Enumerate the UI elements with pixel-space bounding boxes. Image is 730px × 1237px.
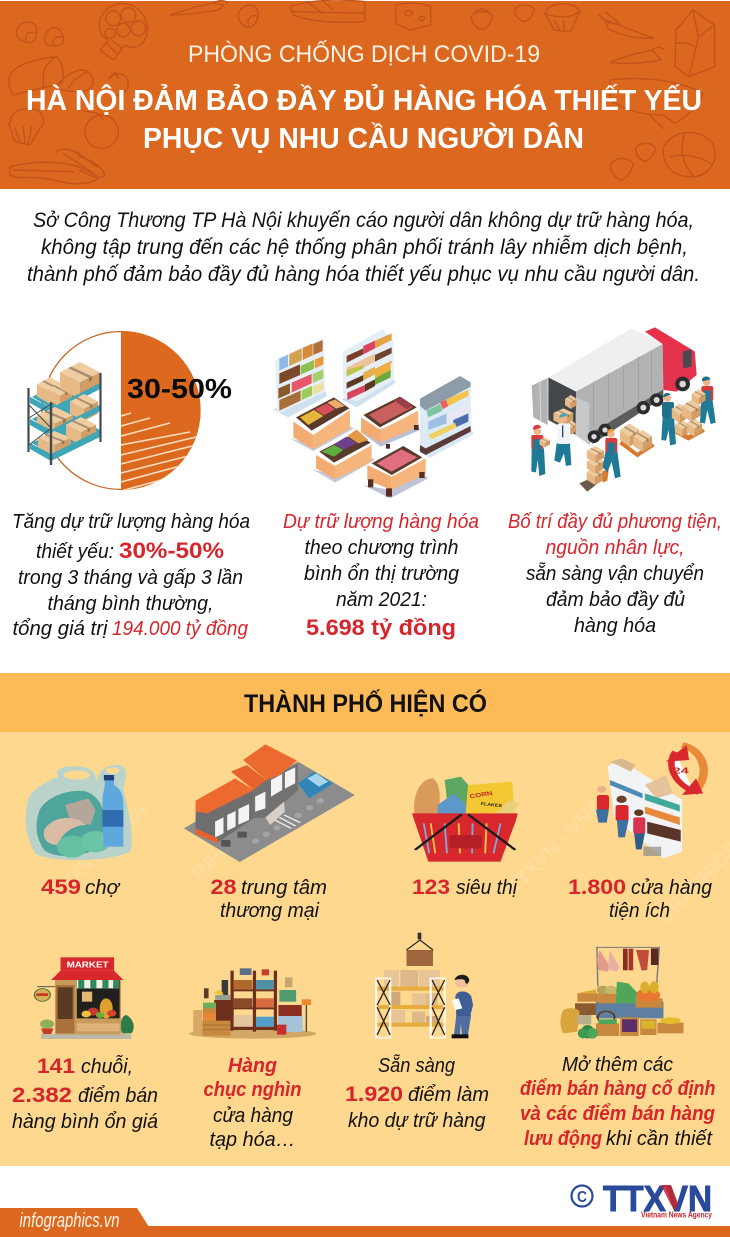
- column 1 text: 194.000 tỷ đồng: [112, 618, 248, 640]
- label: mở thêm các điểm bán hàng: Mở thêm các: [562, 1054, 673, 1076]
- icon: convenience store with 24h: [596, 745, 704, 858]
- shelf A: [273, 338, 327, 417]
- label: 1.800 cửa hàng tiện ích: cửa hàng: [631, 877, 712, 899]
- label: 141 chuỗi, 2.382 điểm bán hàng bình ổn giá: 2.382: [12, 1084, 72, 1107]
- panel: city facilities: [0, 732, 730, 1166]
- labels row 2: [12, 1054, 716, 1151]
- icon: market bag: [26, 765, 132, 860]
- label: 141 chuỗi, 2.382 điểm bán hàng bình ổn giá: hàng bình ổn giá: [12, 1111, 158, 1133]
- faint watermarks: [48, 760, 730, 929]
- worker 3: [603, 429, 621, 478]
- intro paragraph: Sở Công Thương TP Hà Nội khuyến cáo người dân không dự trữ hàng hóa,: [33, 209, 694, 232]
- worker 5: [692, 377, 716, 424]
- food doodles left: [8, 0, 365, 184]
- column 3 text: nguồn nhân lực,: [546, 537, 684, 559]
- shelf B: [342, 329, 396, 407]
- label: 459 chợ: 459: [41, 876, 81, 899]
- label: 28 trung tâm thương mại: trung tâm: [241, 877, 327, 899]
- header subtitle: PHÒNG CHỐNG DỊCH COVID-19: [188, 40, 540, 68]
- section heading band: THÀNH PHỐ HIỆN CÓ: [244, 688, 487, 718]
- label: 24 hours: 24: [673, 766, 689, 776]
- pie stripes: [121, 413, 200, 491]
- intro paragraph: [27, 209, 700, 286]
- label: market sign: MARKET: [67, 961, 109, 970]
- label: hàng chục nghìn cửa hàng tạp hóa: Hàng: [228, 1055, 277, 1077]
- label: mở thêm các điểm bán hàng: khi cần thiết: [606, 1128, 713, 1150]
- worker 4: [661, 393, 676, 445]
- column 3 text: [508, 511, 722, 637]
- labels row 1: [41, 876, 712, 922]
- icon: shopping mall: [184, 744, 355, 862]
- table C: [313, 429, 375, 483]
- faint watermarks: INFOGRAPHICS: [188, 760, 312, 884]
- pie orange half: [121, 331, 200, 490]
- label: 141 chuỗi, 2.382 điểm bán hàng bình ổn giá: điểm bán: [78, 1085, 158, 1107]
- label: hàng chục nghìn cửa hàng tạp hóa: chục nghìn: [204, 1079, 302, 1101]
- icon: warehouse worker: [376, 933, 473, 1038]
- label: mở thêm các điểm bán hàng: và các điểm bán hàng: [520, 1103, 715, 1125]
- column 3 text: đảm bảo đầy đủ: [546, 589, 685, 611]
- label: sẵn sàng 1.920 điểm làm kho dự trữ hàng: kho dự trữ hàng: [348, 1110, 486, 1132]
- icon: grocery shelves: [189, 968, 317, 1039]
- red V mark: [661, 1185, 678, 1211]
- pie value: 30-50%: [127, 373, 232, 404]
- truck: [532, 327, 697, 445]
- footer bar: infographics.vn: [20, 1210, 120, 1232]
- faint watermarks: TTXVN - VNA: [503, 794, 607, 899]
- label: hàng chục nghìn cửa hàng tạp hóa: [204, 1055, 302, 1151]
- label: sẵn sàng 1.920 điểm làm kho dự trữ hàng: Sẵn sàng: [378, 1054, 455, 1077]
- icon: warehouse shelf: [28, 362, 100, 465]
- icon: produce stall: [560, 947, 684, 1039]
- label: 123 siêu thị: siêu thị: [456, 877, 518, 899]
- column 1 text: thiết yếu:: [36, 541, 114, 563]
- icon: market storefront: [34, 957, 134, 1039]
- refrigerated cabinet: [417, 376, 474, 458]
- pallet of boxes: [619, 423, 655, 457]
- column 3 text: sẵn sàng vận chuyển: [526, 562, 704, 585]
- label: 459 chợ: chợ: [85, 877, 121, 899]
- label: 1.800 cửa hàng tiện ích: tiện ích: [609, 900, 670, 922]
- label: hàng chục nghìn cửa hàng tạp hóa: tạp hóa…: [210, 1129, 296, 1151]
- label: hàng chục nghìn cửa hàng tạp hóa: cửa hàng: [213, 1105, 293, 1127]
- column 2 text: bình ổn thị trường: [304, 563, 459, 585]
- column 1 text: tổng giá trị: [12, 618, 108, 640]
- column 3 text: hàng hóa: [574, 615, 656, 637]
- food doodles right: [396, 3, 715, 180]
- column 2 text: năm 2021:: [336, 589, 427, 611]
- header title: PHỤC VỤ NHU CẦU NGƯỜI DÂN: [143, 121, 584, 155]
- label: 459 chợ: [41, 876, 121, 899]
- label: corn flakes box: [469, 789, 503, 809]
- intro paragraph: không tập trung đến các hệ thống phân phối tránh lây nhiễm dịch bệnh,: [41, 236, 688, 259]
- faint watermarks: TTXVN - VNA: [48, 799, 152, 904]
- pie outline: [42, 332, 200, 490]
- column 1 text: Tăng dự trữ lượng hàng hóa: [12, 511, 250, 533]
- copyright mark: [572, 1186, 592, 1206]
- column 1 text: tháng bình thường,: [48, 593, 214, 615]
- table D: [363, 446, 428, 498]
- label: sẵn sàng 1.920 điểm làm kho dự trữ hàng: điểm làm: [408, 1084, 489, 1106]
- footer bar: [0, 1208, 730, 1237]
- column 1 text: 30%-50%: [119, 538, 224, 563]
- intro paragraph: thành phố đảm bảo đầy đủ hàng hóa thiết yếu phục vụ nhu cầu người dân.: [27, 263, 700, 286]
- icon: supermarket shelves and produce tables: [273, 329, 474, 498]
- worker 2: [554, 413, 571, 466]
- label: 141 chuỗi, 2.382 điểm bán hàng bình ổn giá: 141: [37, 1055, 75, 1078]
- column 2 text: theo chương trình: [304, 537, 458, 559]
- chart: pie 30-50% with warehouse shelf: [28, 331, 232, 491]
- header title: [26, 83, 702, 155]
- label: 141 chuỗi, 2.382 điểm bán hàng bình ổn giá: chuỗi,: [81, 1055, 133, 1078]
- label: mở thêm các điểm bán hàng: lưu động: [524, 1128, 602, 1150]
- label: 28 trung tâm thương mại: 28: [210, 876, 237, 899]
- logo: TTXVN: [572, 1178, 712, 1220]
- column 1 text: trong 3 tháng và gấp 3 lần: [18, 567, 243, 589]
- label: 28 trung tâm thương mại: [210, 876, 327, 922]
- label: corn flakes box: FLAKES: [480, 802, 503, 809]
- section heading band: [0, 673, 730, 732]
- table A: [290, 397, 354, 451]
- header banner: [0, 0, 730, 189]
- column 2 text: [283, 511, 479, 640]
- label: corn flakes box: CORN: [469, 789, 494, 800]
- label: 28 trung tâm thương mại: thương mại: [220, 900, 320, 922]
- label: mở thêm các điểm bán hàng: [520, 1054, 716, 1150]
- copyright mark: C: [577, 1189, 587, 1206]
- column 2 text: 5.698 tỷ đồng: [306, 615, 456, 640]
- table B: [360, 397, 420, 449]
- icon: delivery truck with workers: [531, 327, 716, 492]
- agency name: Vietnam News Agency: [641, 1210, 712, 1220]
- worker 1: [531, 425, 550, 476]
- label: sẵn sàng 1.920 điểm làm kho dự trữ hàng: [345, 1054, 489, 1132]
- TTXVN wordmark: TTXVN: [603, 1178, 712, 1219]
- label: 123 siêu thị: [412, 876, 518, 899]
- column 1 text: [12, 511, 250, 640]
- pallet jack with boxes: [579, 446, 609, 492]
- label: 1.800 cửa hàng tiện ích: [568, 876, 712, 922]
- label: 141 chuỗi, 2.382 điểm bán hàng bình ổn giá: [12, 1055, 158, 1133]
- pallet stack: [672, 400, 705, 441]
- label: 123 siêu thị: 123: [412, 876, 450, 899]
- column 2 text: Dự trữ lượng hàng hóa: [283, 511, 479, 533]
- label: 1.800 cửa hàng tiện ích: 1.800: [568, 876, 626, 899]
- label: sẵn sàng 1.920 điểm làm kho dự trữ hàng: 1.920: [345, 1083, 403, 1106]
- icon: shopping basket: [412, 777, 519, 862]
- header title: HÀ NỘI ĐẢM BẢO ĐẦY ĐỦ HÀNG HÓA THIẾT YẾU: [26, 83, 702, 117]
